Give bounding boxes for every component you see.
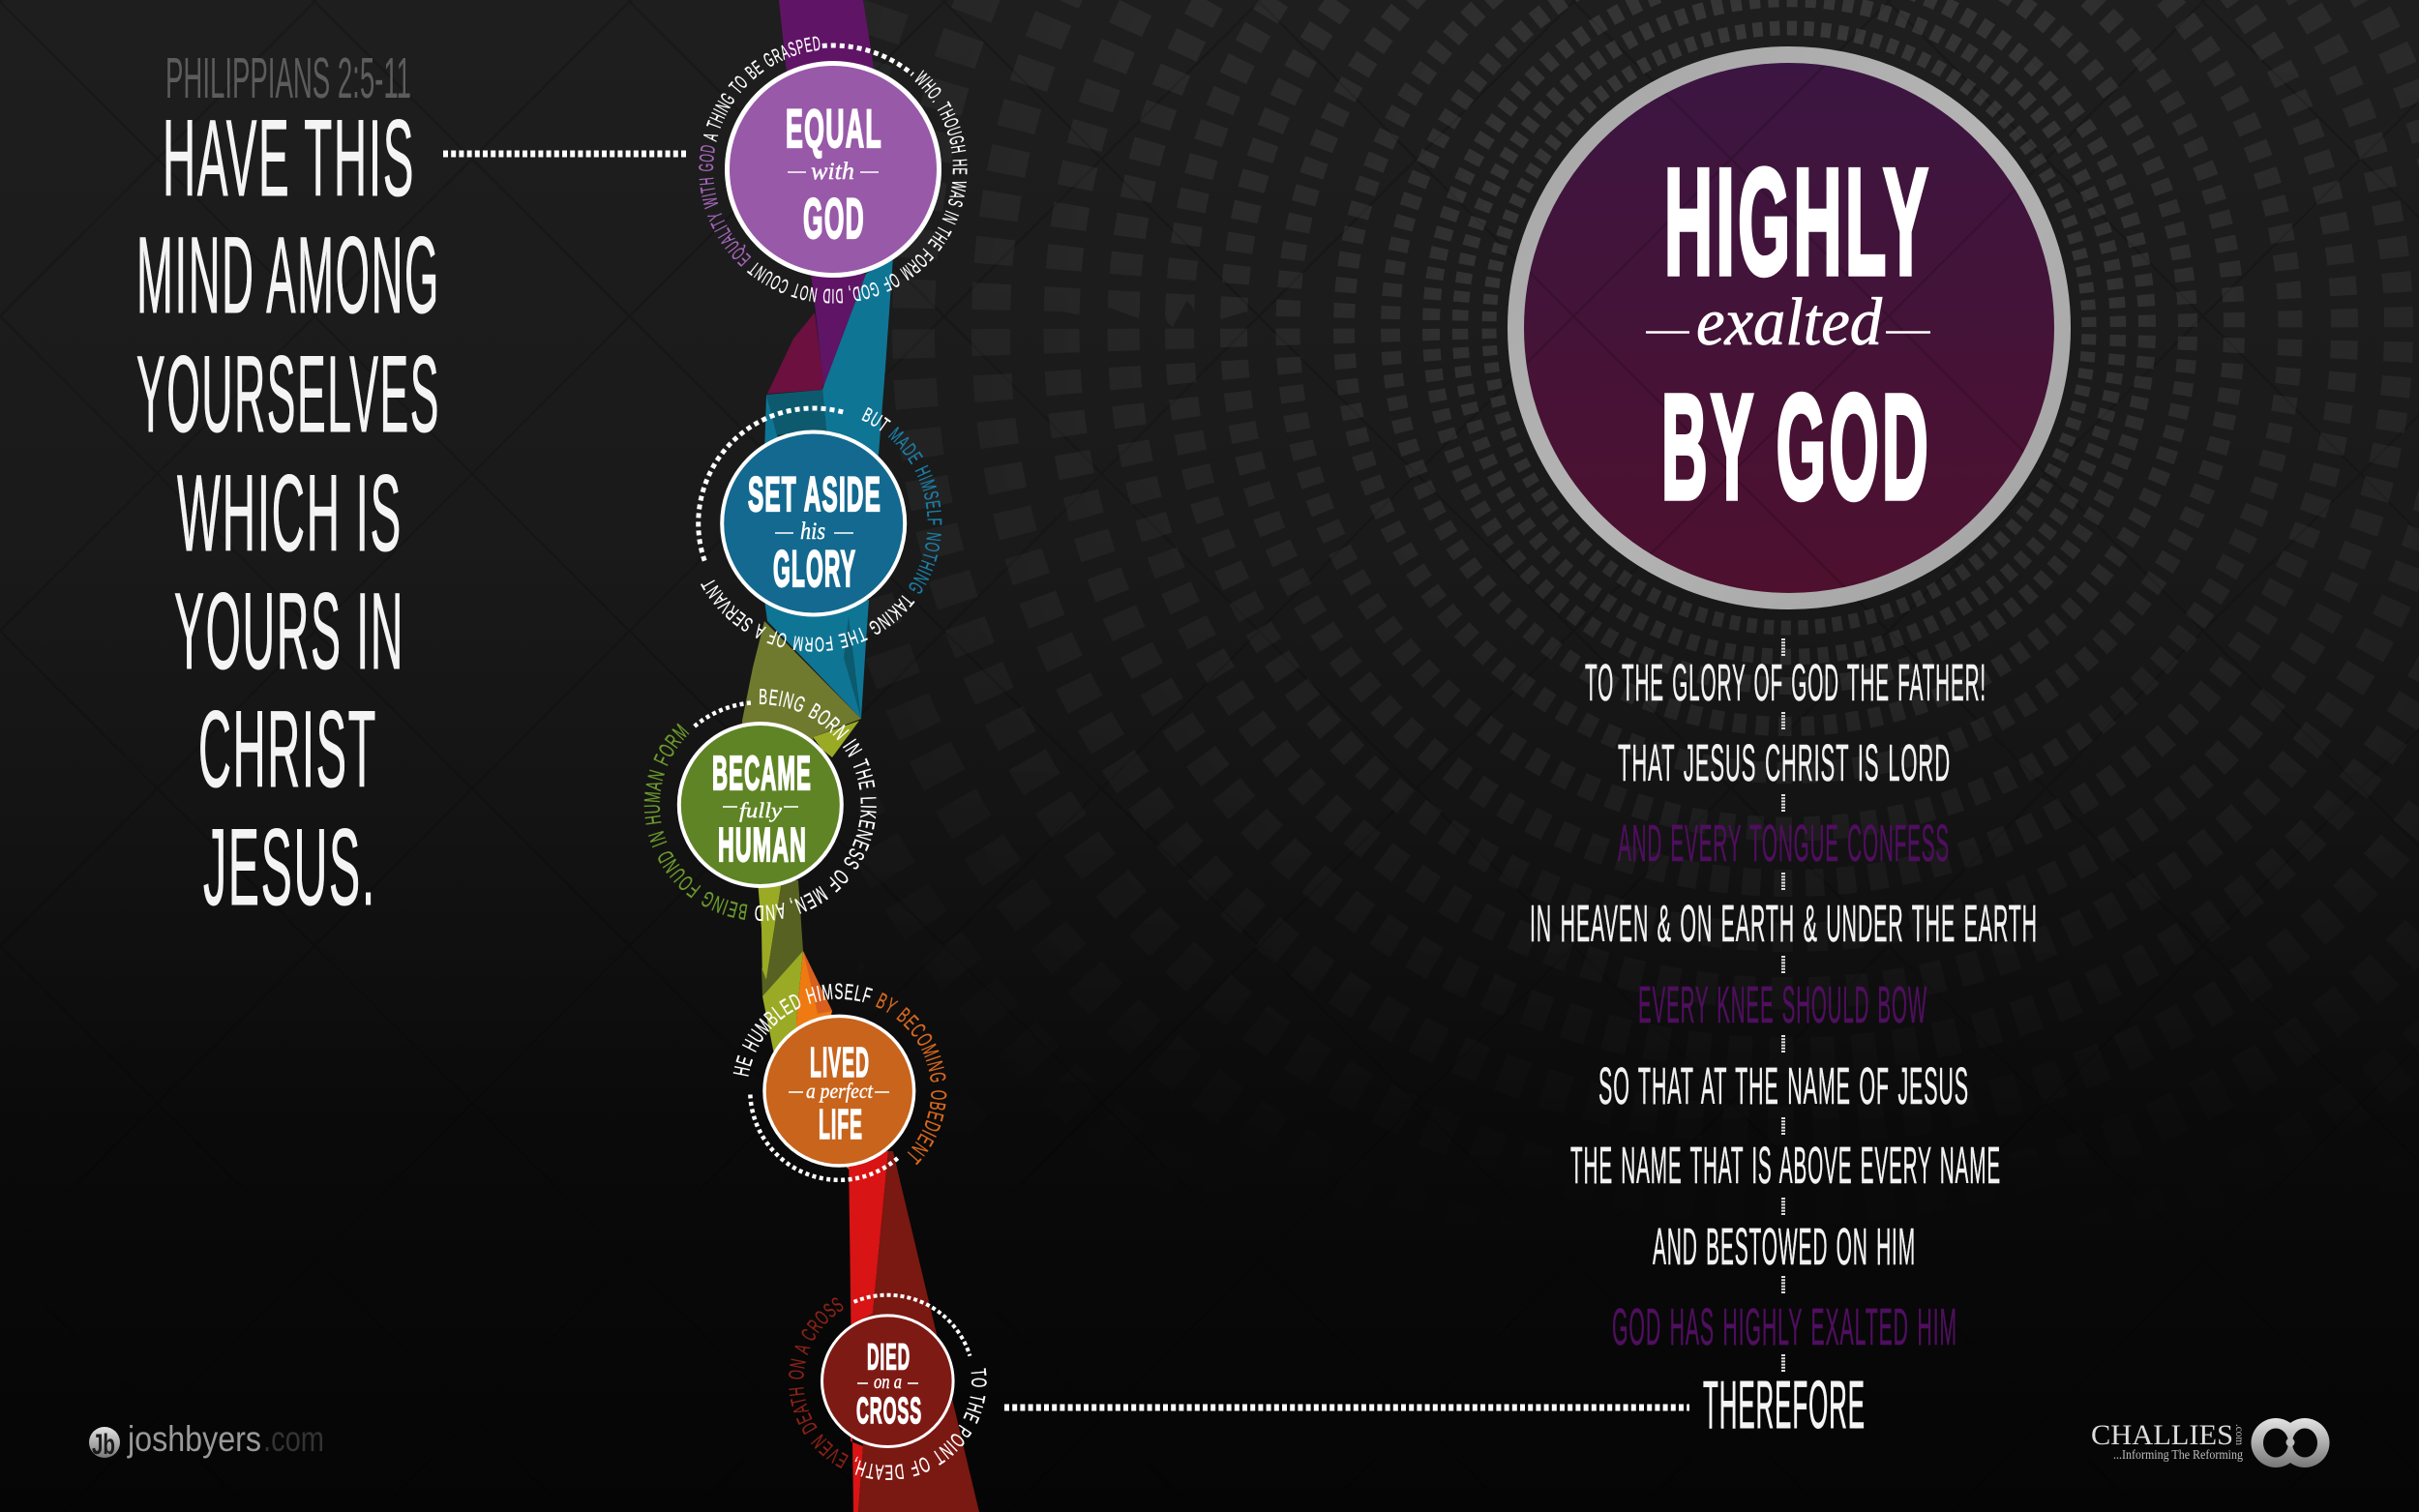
- node: died on a cross: DIED: [867, 1337, 911, 1378]
- node: set aside his glory: BUT MADE HIMSELF NOTHING TAKING THE FORM OF A SERVANT: [701, 406, 942, 652]
- node: equal with God: WHO. THOUGH HE WAS IN THE FORM OF GOD, DID NOT COUNT EQUALITY WITH GOD A THING TO BE GRASPED: [699, 37, 968, 304]
- logo: challies: .com: [2233, 1424, 2247, 1446]
- node: lived a perfect life: LIVED: [810, 1039, 870, 1086]
- logo: challies: ...Informing The Reforming: [2113, 1448, 2243, 1463]
- connector: top dotted line: [443, 151, 686, 157]
- highly exalted circle: HIGHLY: [1664, 138, 1931, 307]
- list of verse lines: THAT JESUS CHRIST IS LORD: [1618, 734, 1951, 792]
- left column exhortation: JESUS.: [203, 807, 376, 928]
- logo: joshbyers: [89, 1419, 324, 1461]
- logo: joshbyers: .com: [263, 1419, 324, 1459]
- text: WHICH IS: [177, 453, 403, 574]
- logo: challies: CHALLIES: [2091, 1419, 2233, 1451]
- list of verse lines: [1530, 638, 2038, 1442]
- left column exhortation: CHRIST: [198, 689, 377, 810]
- left column exhortation: [136, 98, 440, 928]
- node: equal with God: GOD: [803, 188, 865, 251]
- node: lived a perfect life: a perfect: [806, 1079, 874, 1103]
- node: died on a cross: TO THE POINT OF DEATH, EVEN DEATH ON A CROSS: [789, 1297, 987, 1480]
- text: YOURSELVES: [136, 334, 440, 455]
- connector: bottom dotted line: [1004, 1405, 1689, 1410]
- highly exalted circle: [1515, 54, 2063, 602]
- node: set aside his glory: SET ASIDE: [748, 467, 881, 521]
- list of verse lines: AND BESTOWED ON HIM: [1653, 1218, 1916, 1276]
- ribbon: coloured folded band: [742, 0, 979, 1512]
- node: set aside his glory: his: [800, 519, 825, 545]
- text: PHILIPPIANS 2:5-11: [165, 46, 411, 110]
- text: HAVE THIS: [163, 98, 415, 219]
- node: became fully human: BECAME: [712, 748, 812, 800]
- node: lived a perfect life: HE HUMBLED HIMSELF BY BECOMING OBEDIENT: [733, 983, 946, 1165]
- text: MIND AMONG: [136, 215, 440, 336]
- logo: joshbyers: Jb: [92, 1429, 115, 1461]
- logo: joshbyers: joshbyers: [127, 1419, 261, 1459]
- node: equal with God: EQUAL: [786, 98, 882, 159]
- node: lived a perfect life: LIFE: [819, 1101, 863, 1148]
- highly exalted circle: exalted: [1696, 285, 1883, 360]
- node: died on a cross: on a: [874, 1372, 902, 1393]
- highly exalted circle: BY GOD: [1661, 364, 1931, 530]
- node: became fully human: BEING BORN IN THE LIKENESS OF MEN, AND BEING FOUND IN HUMAN FORM: [644, 689, 877, 921]
- radial dash pattern: [876, 0, 2419, 845]
- list of verse lines: EVERY KNEE SHOULD BOW: [1638, 976, 1927, 1034]
- node: became fully human: fully: [739, 798, 782, 822]
- list of verse lines: THEREFORE: [1703, 1367, 1866, 1442]
- node: set aside his glory: GLORY: [773, 541, 856, 598]
- text: YOURS IN: [174, 571, 404, 692]
- node: became fully human: HUMAN: [718, 819, 807, 872]
- logo: challies: [2091, 1418, 2330, 1468]
- node: equal with God: with: [811, 159, 854, 185]
- node: died on a cross: CROSS: [856, 1391, 922, 1432]
